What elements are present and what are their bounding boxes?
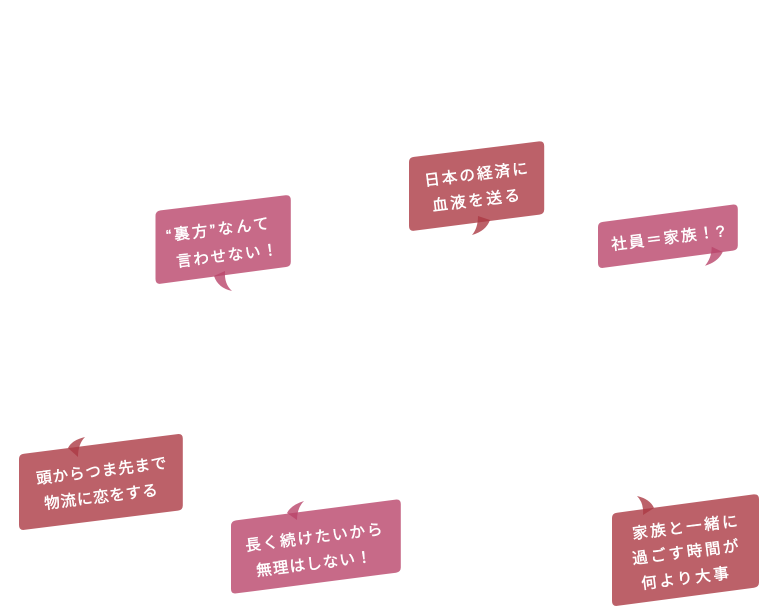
- bubble text: 何より大事: [640, 564, 730, 593]
- bubble text: 無理はしない！: [255, 548, 373, 580]
- bubble text: “裏方”なんて: [165, 215, 270, 245]
- bubble body: [19, 434, 183, 530]
- bubble text: [35, 454, 168, 513]
- bubble tail: [637, 496, 654, 515]
- bubble body: [231, 500, 401, 593]
- bubble tail: [472, 216, 490, 235]
- bubble text: 頭からつま先まで: [35, 454, 168, 488]
- bubble: no overwork: [231, 500, 401, 593]
- bubble body: [409, 141, 544, 231]
- bubble text: 長く続けたいから: [244, 520, 383, 555]
- bubble body: [612, 494, 759, 606]
- bubble tail: [287, 501, 304, 520]
- bubble: sending blood to the economy: [409, 141, 544, 235]
- bubble text: [631, 512, 740, 593]
- bubble text: 物流に恋をする: [43, 481, 159, 513]
- bubble text: 言わせない！: [175, 241, 279, 271]
- bubble text: [423, 159, 529, 215]
- bubble text: [244, 520, 383, 580]
- bubble text: 社員＝家族！?: [610, 222, 726, 254]
- bubble: in love with logistics: [19, 434, 183, 530]
- bubble text: 過ごす時間が: [631, 537, 740, 568]
- bubble: employees are family: [598, 205, 738, 268]
- bubble: behind the scenes: [156, 195, 291, 291]
- bubble body: [598, 205, 738, 268]
- bubble text: 家族と一緒に: [631, 512, 739, 543]
- bubble body: [156, 195, 291, 284]
- bubble text: [165, 215, 279, 271]
- bubble tail: [214, 271, 232, 291]
- bubble text: 日本の経済に: [423, 159, 529, 190]
- bubble tail: [68, 437, 85, 457]
- bubble: family time: [612, 494, 759, 606]
- bubble tail: [705, 247, 723, 266]
- bubble text: 血液を送る: [431, 186, 521, 215]
